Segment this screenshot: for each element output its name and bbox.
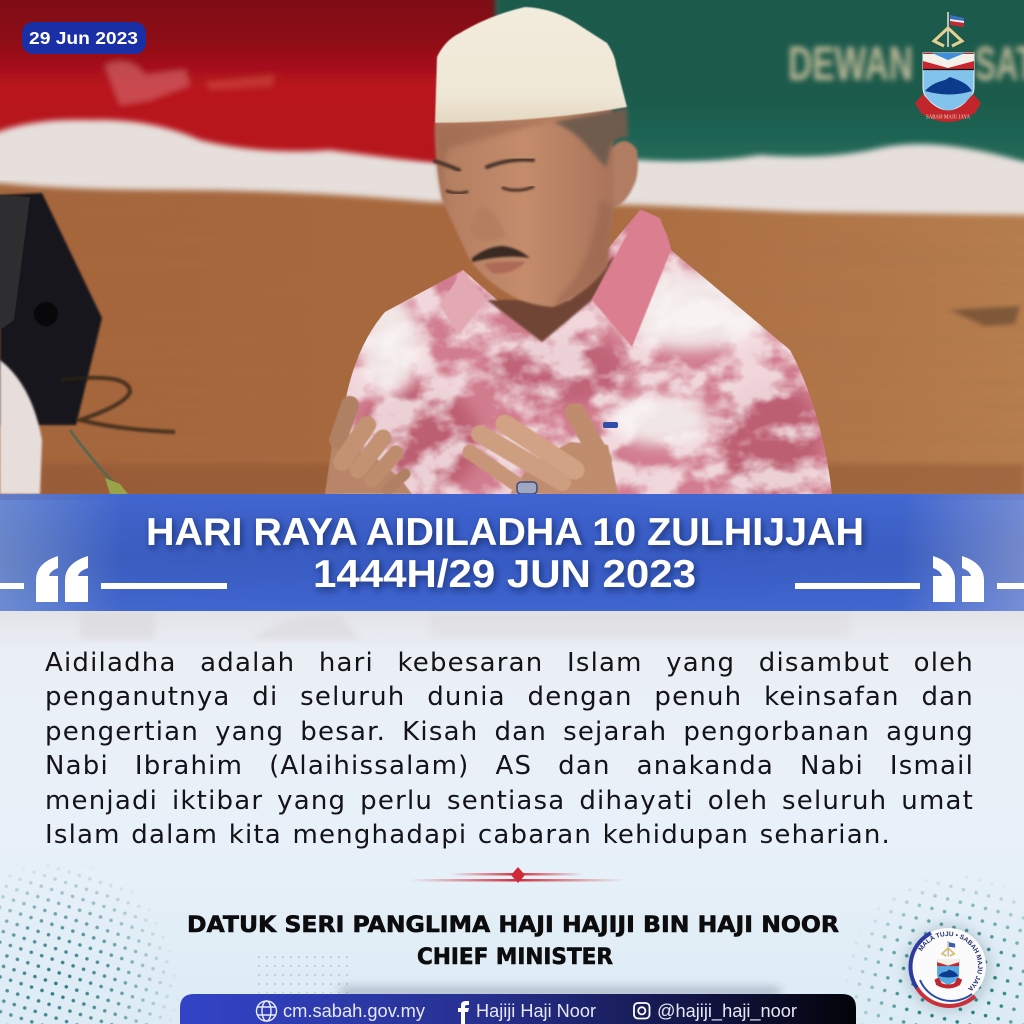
facial shading (435, 118, 612, 307)
green backdrop (495, 0, 1024, 165)
icon: instagram (634, 1003, 650, 1018)
message text: pengertian yang besar. Kisah dan sejarah pengorbanan agung (45, 716, 974, 746)
logo ring text: MALA TUJU • SABAH MAJU JAYA (918, 932, 982, 991)
date badge (22, 22, 146, 54)
heading: 1444H/29 JUN 2023 (313, 553, 696, 596)
heading band (0, 494, 1024, 611)
signatory: CHIEF MINISTER (417, 945, 613, 970)
faded photo reflection (80, 612, 850, 640)
message text (45, 648, 974, 850)
circular logo (900, 920, 996, 1016)
ribbon: SABAH MAJU JAYA (926, 114, 971, 120)
blue pen (603, 422, 618, 428)
logo arcs (910, 933, 975, 1006)
icon: facebook (458, 1001, 469, 1024)
face (435, 108, 614, 307)
website: cm.sabah.gov.my (283, 1001, 425, 1021)
collar left (440, 270, 487, 335)
logo crest (934, 941, 962, 988)
portrait of the Chief Minister praying (320, 7, 840, 500)
photo background (0, 0, 1024, 500)
signatory: DATUK SERI PANGLIMA HAJI HAJIJI BIN HAJI NOOR (187, 913, 839, 938)
moustache (472, 246, 530, 262)
closed eyes (447, 187, 533, 193)
white cloth draping (0, 120, 1024, 215)
ring (517, 482, 537, 494)
red stage backdrop (0, 0, 500, 165)
eyebrows (435, 160, 533, 170)
opening quotation mark with rules (0, 556, 227, 602)
white object at left edge (0, 360, 42, 494)
right praying hand (470, 412, 618, 494)
heading: HARI RAYA AIDILADHA 10 ZULHIJJAH (146, 511, 864, 554)
wooden stage floor (0, 180, 1024, 500)
Sabah state crest (915, 12, 981, 122)
instagram handle: @hajiji_haji_noor (657, 1001, 797, 1022)
date badge: 29 Jun 2023 (29, 28, 138, 48)
collar right (592, 210, 671, 347)
closing quotation mark with rules (795, 556, 1024, 602)
blurred venue lettering: DEWAN (788, 38, 913, 91)
lower panel (0, 611, 1024, 1024)
halftone dots left (0, 864, 176, 1024)
message text: Aidiladha adalah hari kebesaran Islam yang disambut oleh (45, 648, 974, 678)
small dot grid (256, 955, 352, 993)
heading (146, 511, 864, 596)
icon: globe (256, 1001, 276, 1021)
lips (484, 261, 526, 274)
facebook name: Hajiji Haji Noor (476, 1001, 596, 1021)
songkok cap (435, 7, 627, 123)
message text: Nabi Ibrahim (Alaihissalam) AS dan anakanda Nabi Ismail (45, 751, 974, 781)
nose (470, 205, 506, 241)
ear (610, 141, 638, 208)
red diamond divider (410, 867, 624, 883)
shield (923, 53, 974, 112)
hair (553, 108, 628, 168)
shirt (320, 205, 840, 500)
left praying hand (325, 405, 412, 494)
signatory (187, 913, 839, 970)
message text: Islam dalam kita menghadapi cabaran kehidupan seharian. (45, 820, 891, 850)
speaker and cables (0, 193, 175, 494)
neck opening (487, 255, 615, 342)
message text: menjadi iktibar yang perlu sentiasa dihayati oleh seluruh umat (45, 786, 974, 816)
flag (948, 12, 964, 47)
message text: penganutnya di seluruh dunia dengan penuh keinsafan dan (45, 682, 974, 712)
halftone dots right (846, 876, 1024, 1024)
gold arms (934, 28, 962, 46)
social media footer bar (180, 988, 856, 1024)
